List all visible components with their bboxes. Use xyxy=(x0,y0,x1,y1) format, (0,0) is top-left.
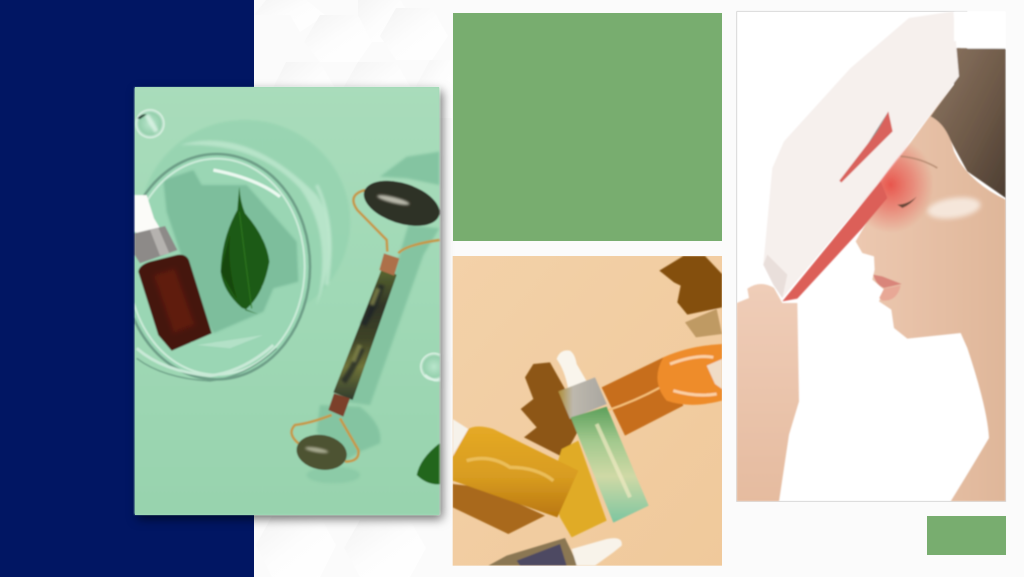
hair xyxy=(929,48,1006,198)
photo panel: serum bottles on beige xyxy=(453,256,722,566)
top white notch xyxy=(954,11,1006,49)
hexagon pattern xyxy=(254,0,452,577)
glass dish xyxy=(123,154,310,381)
water droplets xyxy=(135,109,448,381)
photo panel: LED mask portrait xyxy=(737,11,1006,501)
orange bottle and band xyxy=(602,344,722,436)
lips xyxy=(873,275,902,288)
serum bottle xyxy=(135,195,212,351)
jade roller xyxy=(292,172,445,474)
hand xyxy=(737,284,799,501)
white mask xyxy=(763,11,959,298)
mask red edge xyxy=(782,181,887,301)
eye and brow xyxy=(897,197,917,208)
corner leaf xyxy=(417,443,439,484)
face and neck xyxy=(856,83,1006,501)
eye slot xyxy=(839,111,893,183)
red light glow xyxy=(858,144,930,230)
background shadows xyxy=(521,256,722,537)
amber bottle xyxy=(453,419,578,534)
leaf xyxy=(221,187,269,314)
green accent block xyxy=(927,516,1006,555)
green dropper bottle xyxy=(557,350,649,523)
photo panel: jade roller on mint xyxy=(123,87,448,515)
roller shadows xyxy=(307,152,439,483)
cheek highlight xyxy=(926,194,982,222)
glitter bottle xyxy=(488,538,622,566)
green panel xyxy=(453,13,722,241)
navy side band xyxy=(0,0,254,577)
dish shadow ring xyxy=(146,120,349,302)
